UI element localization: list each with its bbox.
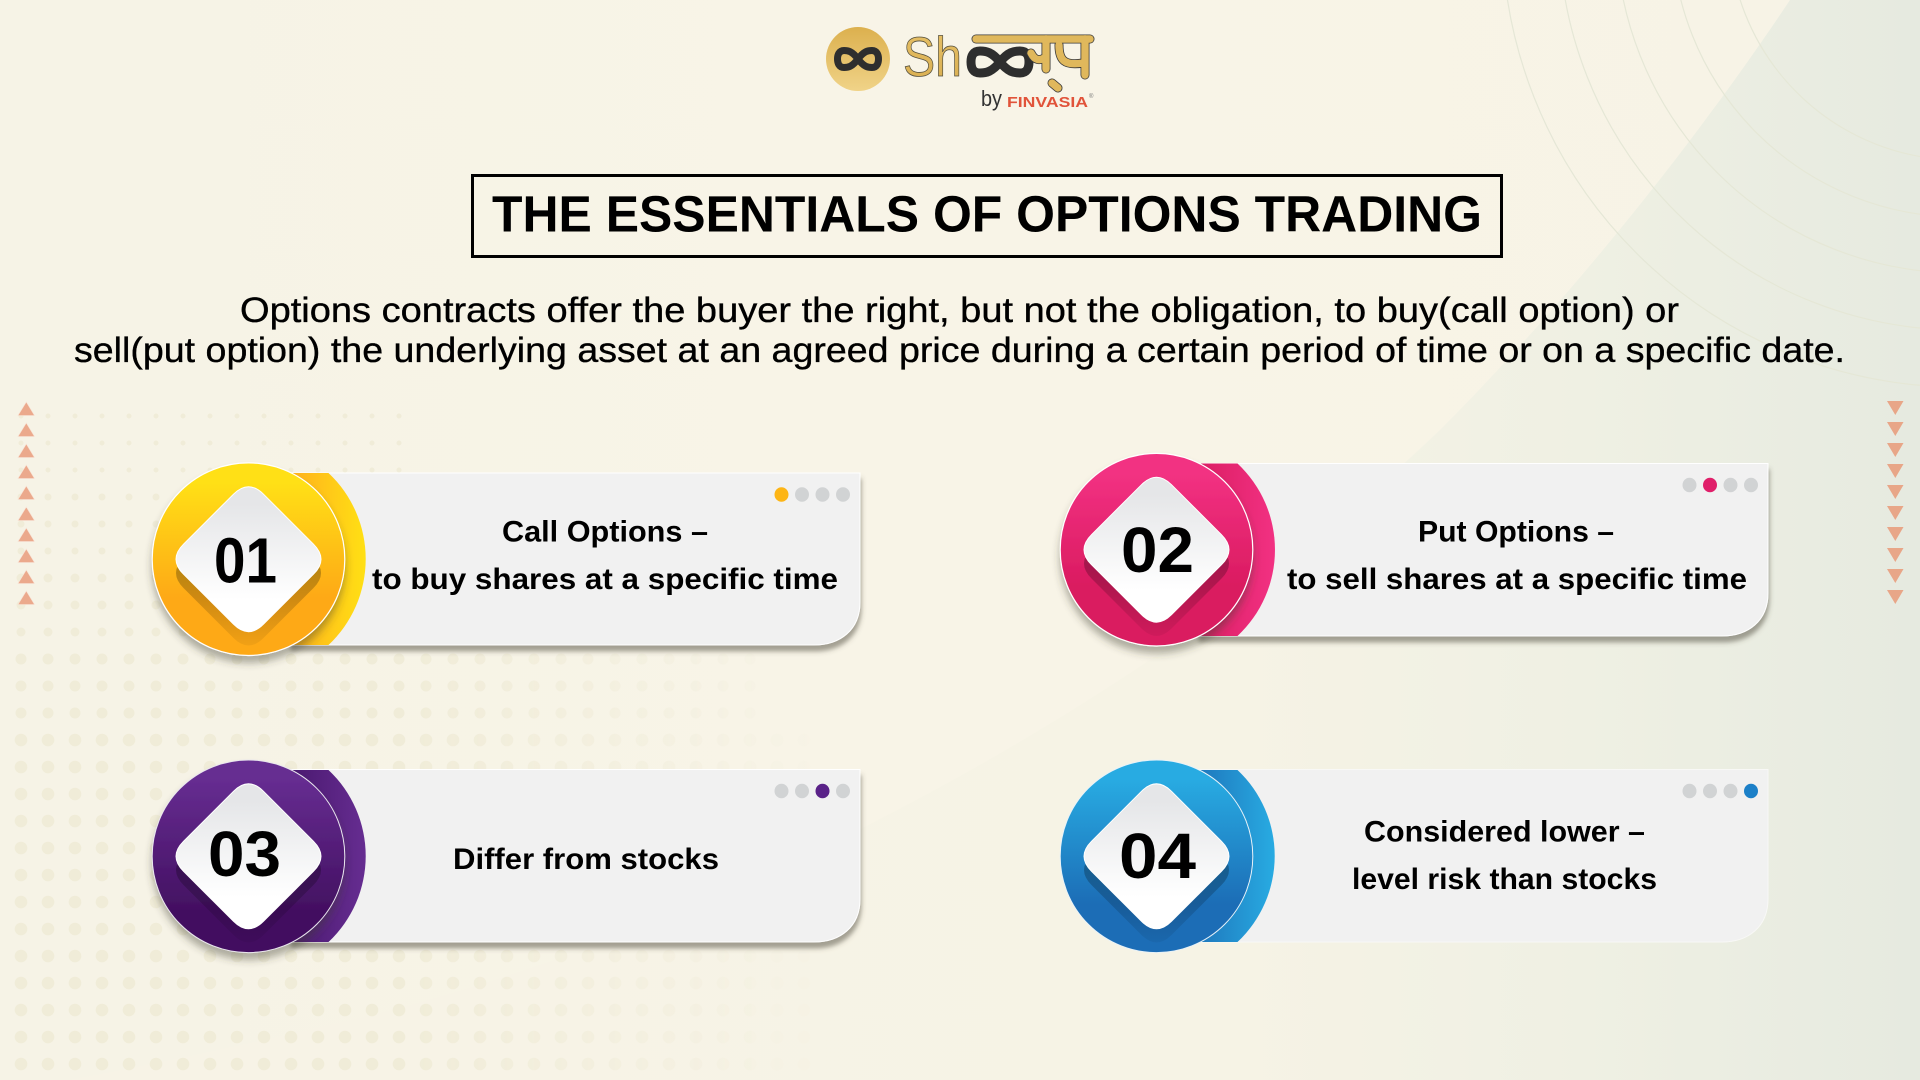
card 01 number: 01 <box>214 524 277 596</box>
card 01 diamond shadow <box>176 500 321 646</box>
logo emblem infinity <box>838 50 878 68</box>
card 02 diamond <box>1084 477 1229 622</box>
card 01 coloured band <box>240 473 366 645</box>
card 04 text <box>1352 816 1657 896</box>
intro paragraph: Options contracts offer the buyer the right, but not the obligation, to buy(call option) or <box>240 291 1679 330</box>
card 04 number: 04 <box>1119 820 1196 892</box>
background concentric arcs <box>1502 0 1920 387</box>
card 01 circle <box>152 463 345 656</box>
logo: Shoonya by Finvasia <box>826 25 1094 111</box>
panel: card 03 differ from stocks <box>152 760 860 953</box>
panel: card 02 put options <box>1060 453 1768 646</box>
logo wordmark infinity <box>971 51 1029 73</box>
card 01 diamond <box>176 487 321 632</box>
right triangles column <box>1887 401 1904 604</box>
card 04 coloured band <box>1148 770 1275 942</box>
card 02 diamond shadow <box>1084 491 1229 636</box>
logo byline by: by <box>981 86 1002 111</box>
card 04 circle <box>1060 760 1253 953</box>
intro paragraph: sell(put option) the underlying asset at an agreed price during a certain period of time or on a specific date. <box>74 331 1845 370</box>
card 04 diamond shadow <box>1084 798 1229 942</box>
card 02 number: 02 <box>1121 514 1194 586</box>
card 02 text: Put Options – <box>1418 516 1614 548</box>
background dot field <box>15 414 594 1070</box>
card 01 text: Call Options – <box>502 516 708 548</box>
card 03 number: 03 <box>208 818 281 890</box>
card 01 body <box>290 473 860 645</box>
card 04 text: level risk than stocks <box>1352 863 1657 896</box>
card 03 text: Differ from stocks <box>453 843 719 876</box>
card 01 pager dots <box>774 487 850 502</box>
title text: THE ESSENTIALS OF OPTIONS TRADING <box>492 186 1482 242</box>
card 01 text: to buy shares at a specific time <box>372 563 838 596</box>
card 02 coloured band <box>1148 464 1275 636</box>
card 02 text: to sell shares at a specific time <box>1287 563 1747 596</box>
logo registered mark: ® <box>1089 93 1094 100</box>
panel: card 01 call options <box>152 463 860 656</box>
card 03 coloured band <box>240 770 366 942</box>
logo wordmark latin: Sh <box>903 25 962 88</box>
card 04 diamond <box>1084 784 1229 929</box>
card 02 body <box>1198 464 1768 636</box>
card 02 circle <box>1060 453 1253 646</box>
card 03 circle <box>152 760 345 953</box>
card 02 pager dots <box>1682 478 1758 492</box>
logo wordmark devanagari mark fill <box>976 39 1090 88</box>
logo byline finvasia: FINVASIA <box>1007 94 1088 111</box>
logo wordmark devanagari mark outline <box>976 39 1090 88</box>
card 04 text: Considered lower – <box>1364 816 1645 848</box>
card 03 diamond <box>176 784 321 929</box>
card 03 body <box>290 770 860 942</box>
card 01 text <box>372 516 838 596</box>
card 03 pager dots <box>774 784 850 798</box>
card 03 diamond shadow <box>176 798 321 942</box>
intro paragraph <box>74 291 1845 370</box>
left triangles column <box>18 402 34 604</box>
logo emblem circle <box>826 27 890 91</box>
card 04 pager dots <box>1682 784 1758 798</box>
title box <box>472 176 1502 256</box>
card 02 text <box>1287 516 1747 596</box>
panel: card 04 lower level risk <box>1060 760 1768 953</box>
card 04 body <box>1198 770 1768 942</box>
